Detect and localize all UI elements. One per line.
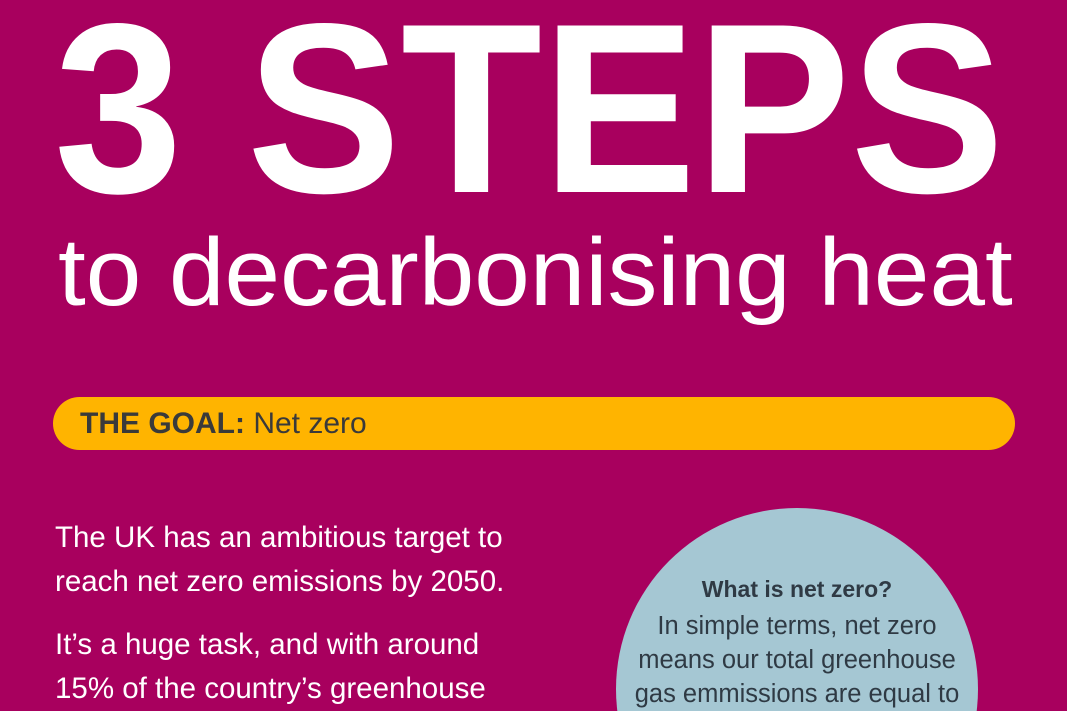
callout: what is net zero: means our total greenhouse	[638, 646, 956, 674]
intro text: It’s a huge task, and with around 15% of the country’s greenhouse	[55, 628, 486, 705]
goal bar: THE GOAL: Net zero	[80, 407, 367, 440]
callout: what is net zero: In simple terms, net zero	[657, 612, 937, 640]
callout: what is net zero: gas emmissions are equal to	[635, 680, 959, 708]
subtitle: to decarbonising heat	[58, 219, 1013, 326]
intro text: The UK has an ambitious target to reach net zero emissions by 2050.	[55, 521, 504, 598]
goal bar	[53, 397, 1015, 450]
intro text	[55, 521, 504, 705]
callout: what is net zero: What is net zero?	[702, 576, 892, 602]
callout: what is net zero	[616, 508, 978, 711]
